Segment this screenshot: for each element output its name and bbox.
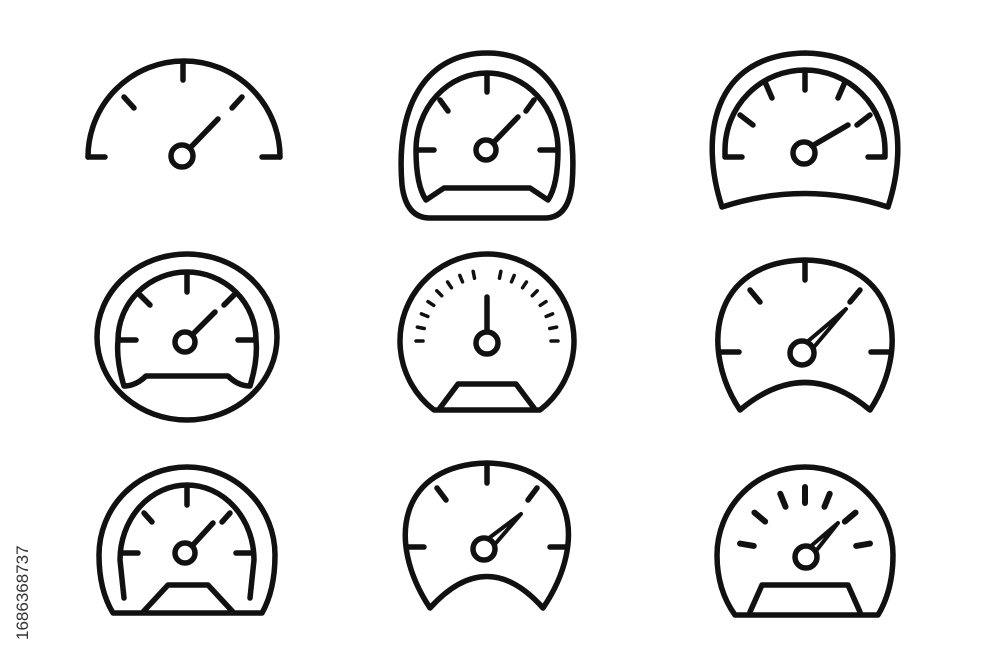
icon: gauge with inner arc and base [99,467,275,613]
icon: double-frame gauge with base [401,53,573,218]
icon: concave-bottom gauge with tapered needle [718,260,892,410]
icon: fine-tick gauge [400,254,574,410]
icon: dashed gauge with base [717,467,893,615]
icon: round gauge with inner frame [97,254,277,420]
icon: concave-bottom gauge [405,463,568,608]
watermark id text: 1686368737 [13,545,32,640]
icon: half-arc gauge [88,61,280,167]
icon: curved-bottom gauge with inner arc [712,53,898,207]
